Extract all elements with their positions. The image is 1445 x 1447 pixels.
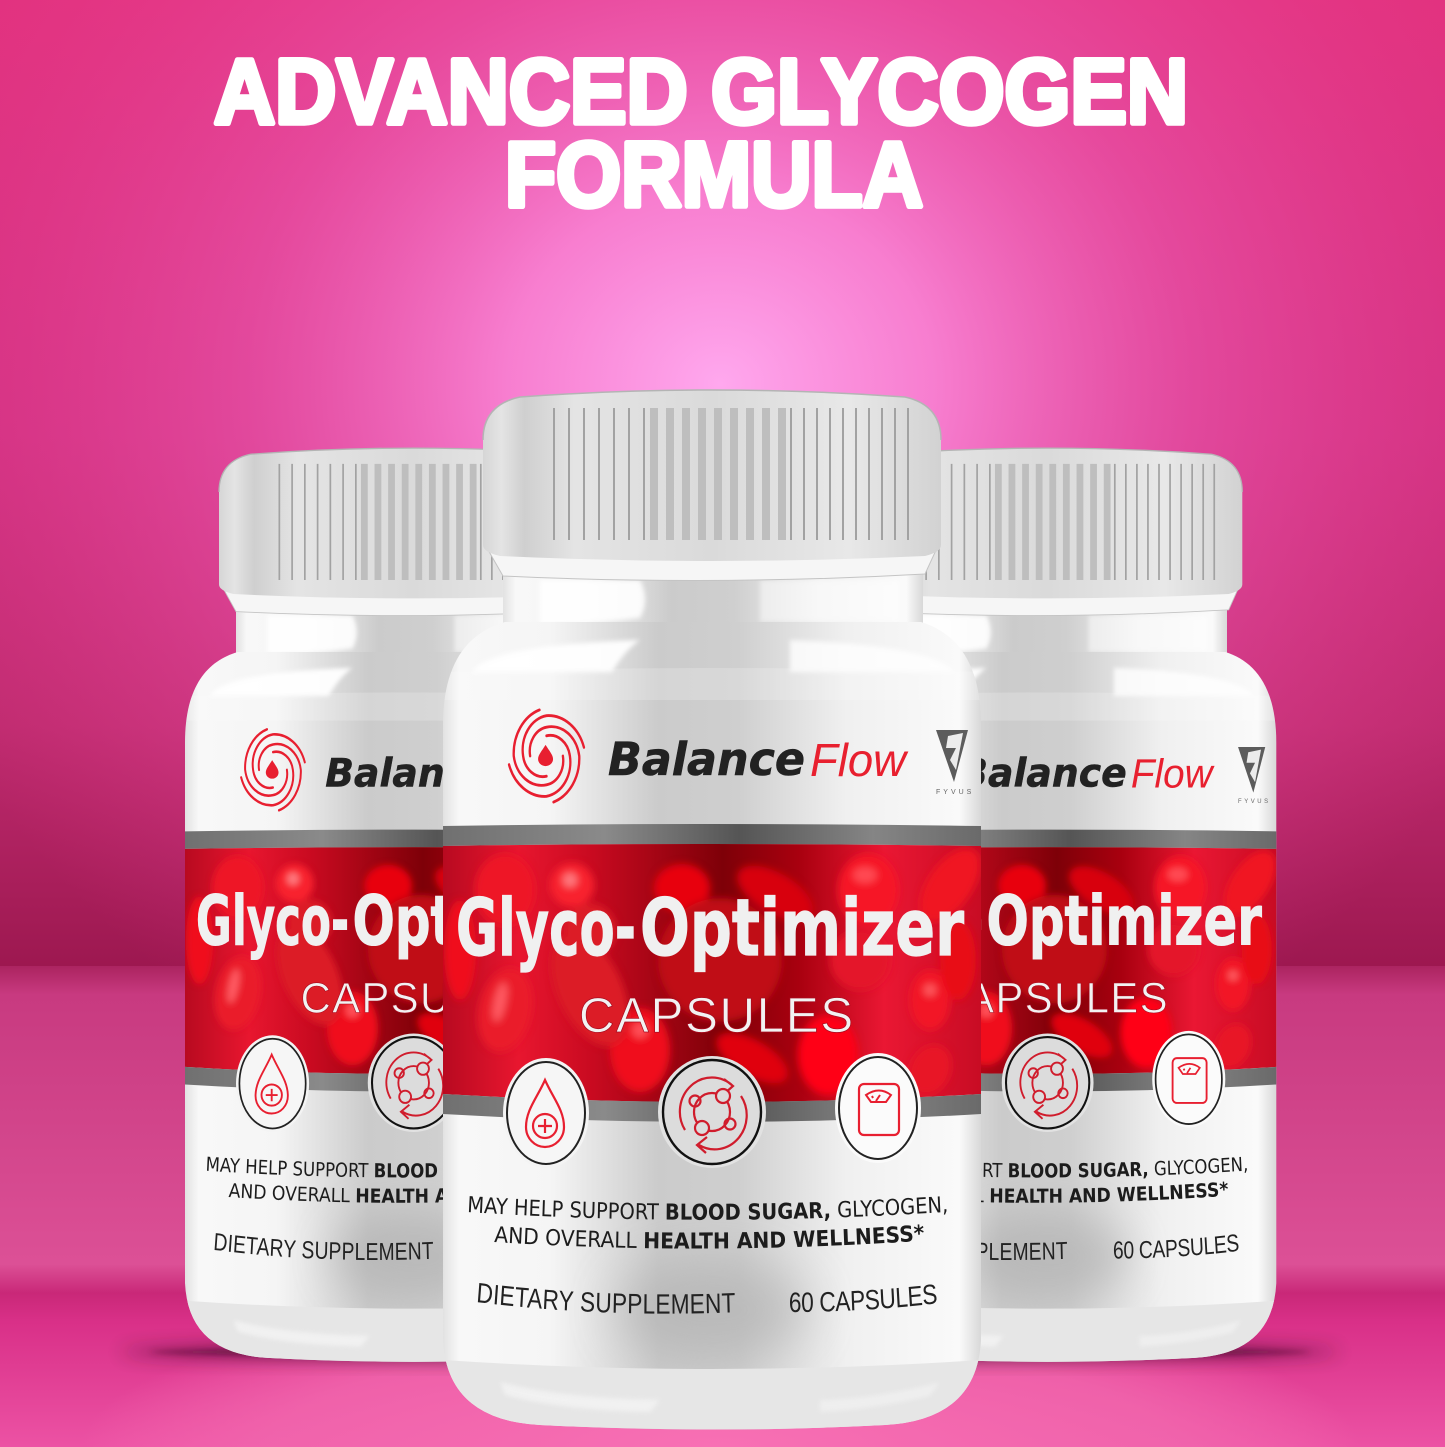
body (443, 622, 981, 1440)
cap (483, 390, 941, 640)
claim text (207, 1156, 443, 1203)
capsules word: CAPSULES (301, 974, 534, 1022)
brand name: Balance (959, 751, 1127, 797)
supplement line: DIETARY SUPPLEMENT (478, 1283, 735, 1314)
product name: Optimizer (352, 881, 628, 961)
product name (456, 884, 964, 974)
supplement line (981, 1234, 1238, 1260)
brand name: Flow (1131, 752, 1215, 797)
icon: metabolism (368, 1034, 460, 1132)
claim text: AND OVERALL HEALTH AND WELLNESS* (981, 1182, 1228, 1203)
claim text: AND OVERALL HEALTH AND WELLNESS* (494, 1224, 924, 1249)
product name (196, 881, 628, 961)
title: ADVANCED GLYCOGEN (214, 41, 1188, 143)
claim text (981, 1156, 1247, 1203)
right bottle (830, 448, 1276, 1362)
icon: scale (1152, 1031, 1225, 1128)
brand logo (509, 710, 584, 802)
fyvus mark: FYVUS (936, 789, 974, 796)
supplement line: 60 CAPSULES (790, 1284, 936, 1312)
brand name: Balance (325, 751, 493, 797)
fyvus mark (936, 730, 974, 796)
product name (830, 881, 1262, 961)
brand name (959, 751, 1215, 797)
product name: Optimizer (640, 884, 964, 974)
claim text (468, 1196, 946, 1249)
center bottle (443, 389, 981, 1430)
claim text: MAY HELP SUPPORT BLOOD SUGAR, GLYCOGEN, (468, 1196, 946, 1221)
capsules word: CAPSULES (935, 974, 1168, 1022)
title: FORMULA (505, 124, 923, 226)
red label band (819, 830, 1286, 1092)
brand name: Balance (608, 733, 805, 786)
product name: Glyco- (196, 881, 349, 961)
icon: blood drop (236, 1035, 309, 1132)
left bottle (185, 448, 628, 1362)
product name: Glyco- (456, 884, 636, 974)
icon: metabolism (1002, 1034, 1094, 1132)
red label band (443, 824, 992, 1122)
fyvus mark: FYVUS (1238, 799, 1271, 805)
icon: metabolism (658, 1056, 766, 1168)
title (214, 41, 1188, 226)
claim text: MAY HELP SUPPORT BLOOD SUGAR, GLYCOGEN, (981, 1156, 1247, 1178)
product name: Optimizer (986, 881, 1262, 961)
claim text: AND OVERALL HEALTH AND WELLNESS* (228, 1183, 443, 1203)
floor shadow (120, 1344, 1340, 1360)
icon: blood drop (503, 1058, 589, 1168)
supplement line: DIETARY SUPPLEMENT (981, 1242, 1067, 1260)
background wall (0, 0, 1445, 966)
capsules word: CAPSULES (579, 989, 853, 1043)
supplement line: DIETARY SUPPLEMENT (214, 1233, 433, 1260)
supplement line: 60 CAPSULES (1114, 1234, 1238, 1259)
claim text: MAY HELP SUPPORT BLOOD SUGAR, GLYCOGEN, (207, 1156, 438, 1178)
fyvus mark (1238, 747, 1271, 805)
supplement line (478, 1283, 936, 1314)
background floor (0, 966, 1445, 1447)
red label band (185, 830, 652, 1092)
product name: Glyco- (830, 881, 983, 961)
brand logo (241, 729, 305, 810)
brand name: Flow (810, 734, 909, 786)
icon: scale (835, 1053, 921, 1163)
brand name (608, 733, 909, 786)
